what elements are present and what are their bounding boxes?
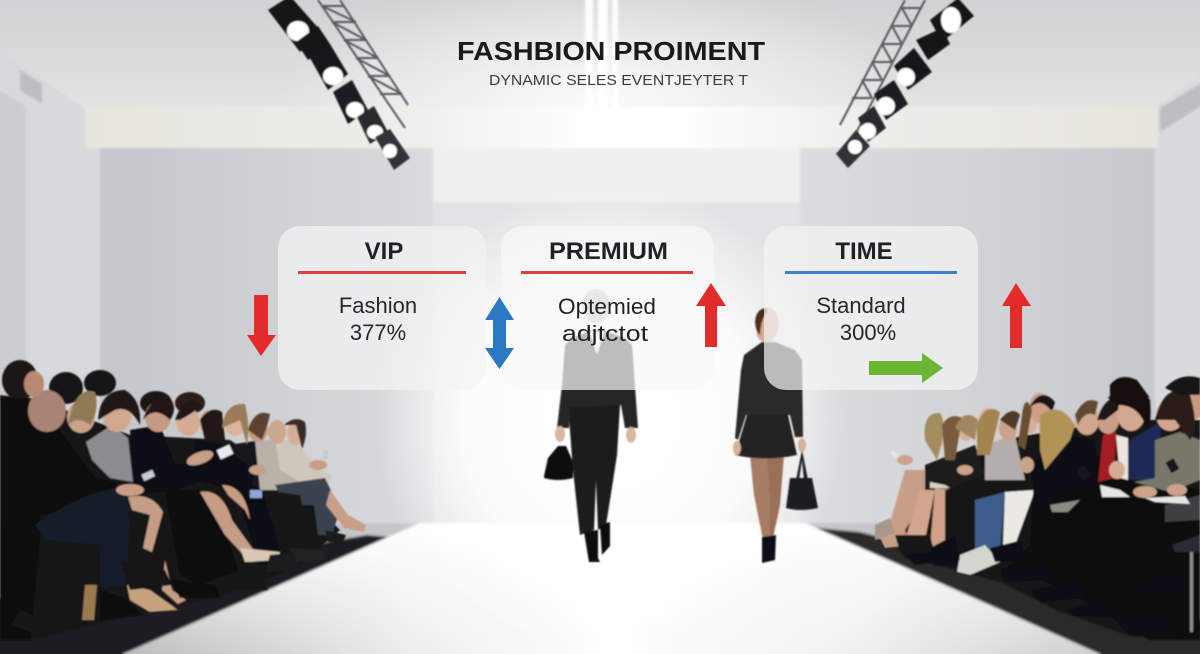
far seated bodies — [228, 438, 366, 555]
heading: VIP — [365, 238, 403, 265]
heading: PREMIUM — [549, 238, 668, 265]
faces — [24, 371, 305, 445]
hair — [68, 390, 306, 449]
grey jacket — [86, 425, 133, 482]
text block: Fashion — [339, 293, 417, 318]
panel: PREMIUM — [501, 226, 714, 390]
lamp 5 — [836, 130, 870, 168]
right side wall — [1155, 70, 1200, 530]
handbag — [544, 446, 573, 480]
hair — [925, 376, 1200, 470]
floor left margin — [0, 523, 430, 654]
far seated people — [875, 435, 1035, 575]
mid-row dark clothing — [130, 425, 290, 585]
right model — [733, 308, 818, 563]
white shirt — [590, 332, 604, 354]
text block: Optemied — [558, 294, 656, 319]
dark backing mass — [0, 395, 340, 640]
subtitle: DYNAMIC SELES EVENTJEYTER T — [489, 72, 748, 89]
lamp 1 — [930, 0, 974, 42]
black top — [1030, 435, 1100, 510]
arrow: red up premium — [696, 283, 726, 347]
card — [278, 226, 486, 390]
pleated skirt — [735, 415, 797, 458]
dark backing mass — [890, 420, 1200, 640]
panel: VIP — [278, 226, 486, 390]
text block: Standard — [816, 293, 906, 318]
right vent — [1160, 78, 1200, 132]
value: 377% — [350, 320, 406, 345]
left model — [544, 289, 638, 562]
arrow: red up time — [1002, 283, 1031, 348]
lamp 4 — [858, 106, 886, 142]
arrow: blue double — [485, 297, 514, 369]
navy jacket — [1125, 422, 1163, 480]
overhead beam — [85, 107, 1158, 148]
runway fade — [123, 523, 1100, 654]
front man trousers — [35, 487, 129, 588]
bag — [786, 450, 818, 510]
seat leg — [1190, 552, 1193, 632]
grey trouser knee — [1165, 495, 1200, 522]
hands and phones — [890, 450, 1187, 498]
lamp 3 — [333, 80, 368, 124]
faces — [926, 391, 1200, 451]
hands — [555, 426, 636, 443]
hands — [733, 438, 806, 455]
left vent — [20, 70, 42, 104]
leg two — [767, 455, 784, 540]
seat — [1172, 535, 1200, 552]
main dark mass — [1000, 440, 1200, 640]
left leg — [568, 405, 596, 535]
leather jacket — [735, 342, 803, 440]
red sweater — [1098, 432, 1116, 482]
runway — [123, 523, 1100, 654]
grey coat — [1134, 432, 1200, 492]
papers — [930, 482, 1190, 512]
left audience — [0, 360, 366, 640]
lamp 1b — [916, 28, 950, 60]
value: 300% — [840, 320, 896, 345]
lamp 3 — [874, 80, 908, 120]
left spotlight rig — [268, 0, 410, 170]
title: FASHBION PROIMENT — [457, 36, 765, 66]
value: adjtctot — [562, 321, 648, 346]
card — [501, 226, 714, 390]
back wall left — [100, 148, 433, 528]
front man body — [0, 398, 118, 640]
bare legs — [128, 485, 278, 604]
lamp 1b — [296, 26, 330, 60]
leg one — [750, 455, 770, 540]
lamp 1 — [268, 0, 320, 52]
boots — [762, 535, 776, 563]
rule — [785, 271, 957, 274]
right spotlight rig — [836, 0, 974, 168]
jacket — [557, 330, 638, 428]
heading: TIME — [835, 238, 893, 265]
central white glow — [375, 185, 845, 654]
front shoes — [10, 530, 346, 632]
centre recess — [433, 202, 800, 542]
back row heads — [2, 360, 205, 415]
truss — [318, 0, 408, 128]
head — [755, 308, 779, 343]
lamp 5 — [375, 129, 410, 170]
dark carpet left — [0, 535, 400, 654]
phones — [141, 445, 328, 498]
lamp 2 — [310, 44, 348, 90]
ceiling — [0, 0, 1200, 150]
shoes — [905, 540, 1185, 636]
dark carpet right — [806, 527, 1200, 654]
panel: TIME — [764, 226, 978, 390]
back wall right — [800, 148, 1155, 528]
centre back panel — [433, 148, 800, 528]
left side wall — [0, 45, 100, 530]
floor right margin — [800, 523, 1200, 654]
rule — [521, 271, 693, 274]
lamp 4 — [357, 106, 388, 144]
right leg — [594, 405, 620, 530]
arrow: green right — [869, 353, 943, 383]
hands — [116, 448, 327, 496]
lamp 2 — [894, 48, 932, 90]
white shirt — [1116, 435, 1128, 480]
arrow: red down — [247, 295, 276, 356]
boots — [584, 522, 610, 562]
left wall seam panel — [0, 85, 26, 400]
card — [764, 226, 978, 390]
truss — [840, 0, 925, 135]
skylight strip — [585, 0, 618, 148]
hair — [755, 308, 767, 335]
ceiling glow — [280, 0, 920, 230]
right audience — [875, 376, 1200, 640]
head — [582, 289, 610, 323]
rule — [298, 271, 466, 274]
